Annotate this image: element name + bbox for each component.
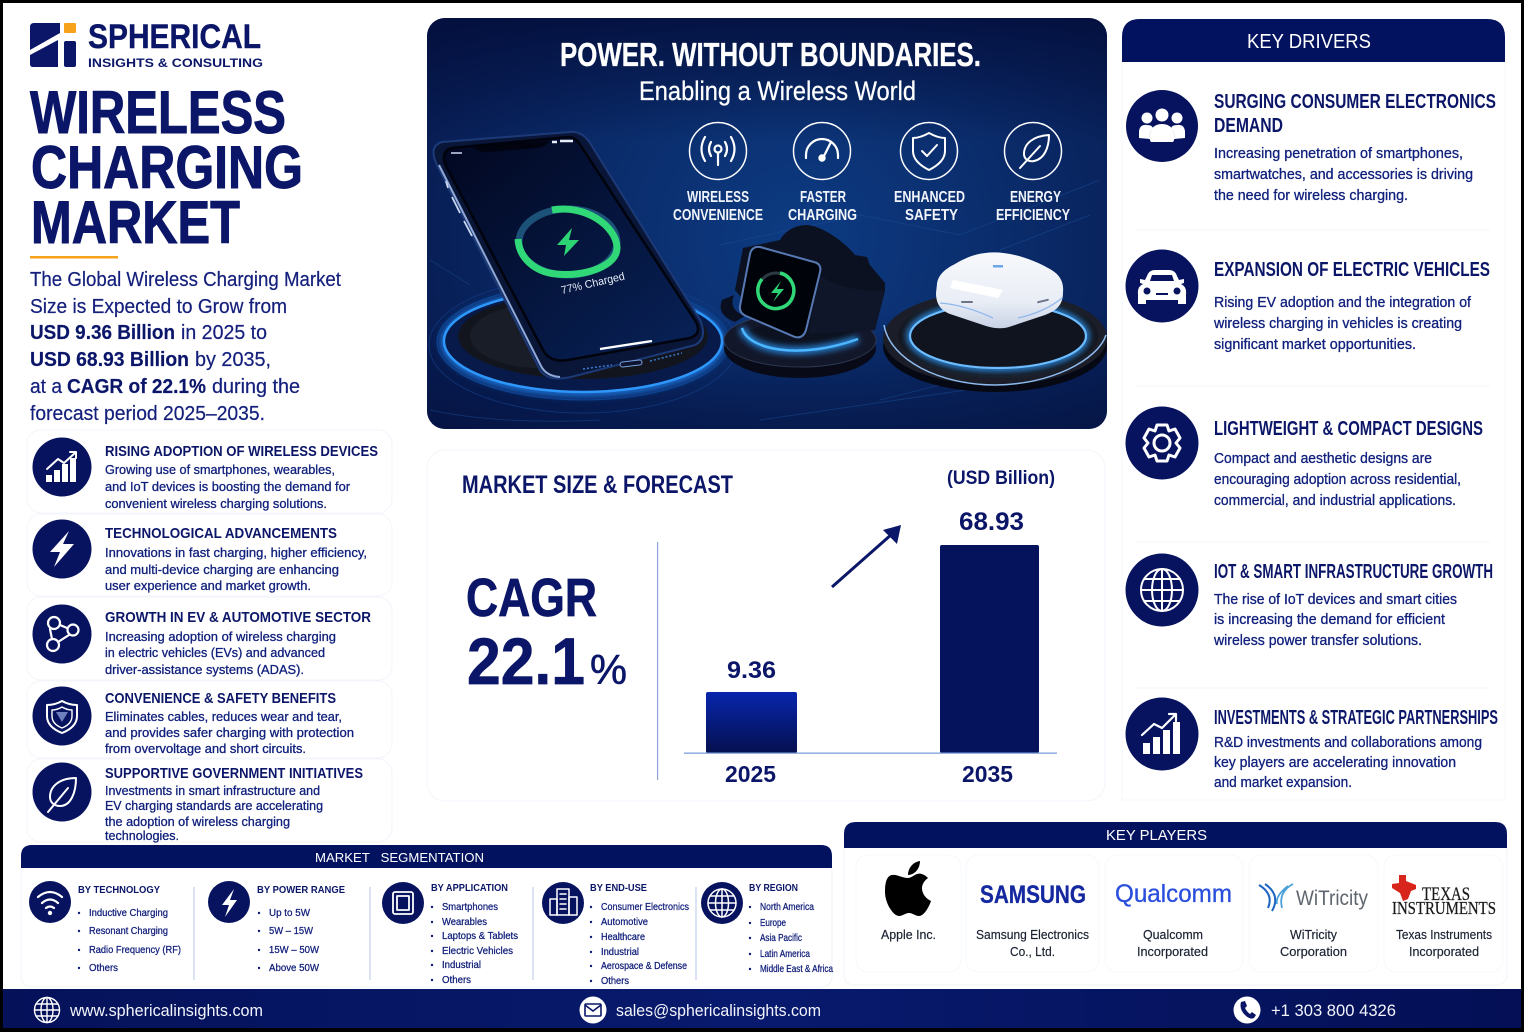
summary paragraph: at a [30, 376, 63, 398]
panel: market size and forecast: MARKET SIZE & FORECAST [462, 471, 733, 499]
segment: by application [382, 882, 518, 986]
driver: electric vehicles: significant market opportunities. [1214, 337, 1416, 353]
player: Texas Instruments: Incorporated [1409, 945, 1479, 959]
title: MARKET [31, 189, 240, 256]
segment: by power range: Up to 5W [269, 908, 311, 919]
CAGR callout: 22.1 [467, 624, 585, 698]
segment: by technology: Inductive Charging [89, 908, 168, 919]
segment: by application: Others [442, 975, 471, 986]
segment: by application: Laptops & Tablets [442, 931, 518, 942]
driver: IoT and smart infrastructure: The rise of IoT devices and smart cities [1214, 592, 1457, 608]
segment: by region: North America [760, 902, 814, 913]
card: EV and automotive: GROWTH IN EV & AUTOMOTIVE SECTOR [105, 609, 371, 626]
card: rising adoption: and IoT devices is boosting the demand for [105, 479, 351, 494]
segment: by region: Asia Pacific [760, 933, 802, 944]
card: EV and automotive [27, 597, 392, 680]
driver: consumer electronics: DEMAND [1214, 115, 1283, 137]
player: Qualcomm: Qualcomm [1115, 880, 1232, 908]
player: Samsung [966, 855, 1099, 972]
summary paragraph: The Global Wireless Charging Market [30, 269, 341, 291]
segment: by power range: Above 50W [269, 963, 320, 974]
smartwatch [721, 225, 885, 337]
segment: by region: Europe [760, 918, 786, 929]
footer: +1 303 800 4326 [1271, 1001, 1396, 1020]
driver: consumer electronics: smartwatches, and accessories is driving [1214, 167, 1473, 183]
player: Qualcomm [1105, 855, 1243, 972]
driver: compact designs [1126, 406, 1483, 509]
card: technological advancements: user experience and market growth. [105, 578, 311, 593]
CAGR callout: CAGR [466, 568, 597, 628]
player: WiTricity: Corporation [1280, 945, 1347, 959]
summary paragraph [30, 269, 341, 425]
icon: mail [580, 996, 606, 1024]
hero heading [560, 36, 981, 106]
player: Samsung: Co., Ltd. [1010, 945, 1055, 959]
card: convenience and safety: Eliminates cables, reduces wear and tear, [105, 709, 342, 724]
earbuds case [936, 252, 1063, 328]
segment: by end-use: Aerospace & Defense [601, 961, 687, 972]
player: Texas Instruments: TEXAS [1422, 884, 1470, 905]
segment: by region [701, 882, 833, 975]
bar chart: 9.36 [727, 657, 776, 684]
player: WiTricity [1249, 855, 1378, 972]
icon: phone [1234, 996, 1260, 1024]
summary paragraph: in 2025 to [181, 322, 267, 344]
panel: growth factors [27, 430, 392, 843]
benefit: faster charging [788, 122, 857, 224]
segment: by power range: 15W – 50W [269, 945, 320, 956]
segment: by end-use [542, 882, 689, 987]
hero heading: POWER. WITHOUT BOUNDARIES. [560, 36, 981, 73]
panel: key players: KEY PLAYERS [1106, 827, 1207, 844]
icon: globe [34, 998, 60, 1022]
driver: compact designs: commercial, and industrial applications. [1214, 493, 1456, 509]
logo: SPHERICAL [88, 18, 261, 56]
segment: by end-use: BY END-USE [590, 882, 647, 894]
summary paragraph: during the [212, 376, 300, 398]
card: convenience and safety [27, 681, 392, 758]
battery ring [518, 209, 617, 275]
segment: by power range: 5W – 15W [269, 926, 314, 937]
charging pad: phone [429, 277, 737, 413]
logo: INSIGHTS & CONSULTING [88, 56, 263, 70]
footer: sales@sphericalinsights.com [616, 1001, 821, 1020]
summary paragraph: USD 9.36 Billion [30, 322, 175, 344]
segment: by region: Latin America [760, 949, 810, 960]
card: rising adoption [27, 430, 392, 513]
segment: by technology: BY TECHNOLOGY [78, 884, 160, 896]
benefit: energy efficiency: ENERGY [1010, 189, 1062, 206]
card: technological advancements [27, 514, 392, 596]
driver: investments and partnerships: and market expansion. [1214, 775, 1352, 791]
driver: electric vehicles: wireless charging in vehicles is creating [1213, 316, 1462, 332]
arrow [832, 525, 901, 587]
card: government initiatives: technologies. [105, 828, 179, 843]
benefit: wireless convenience: WIRELESS [687, 189, 749, 206]
benefit: energy efficiency: EFFICIENCY [996, 207, 1071, 224]
segment: by end-use: Others [601, 976, 629, 987]
segment: by technology: Others [89, 963, 118, 974]
charging pad: earbuds [883, 291, 1107, 392]
card: rising adoption: convenient wireless charging solutions. [105, 496, 327, 511]
segment: by technology [29, 881, 181, 974]
driver: electric vehicles: Rising EV adoption and the integration of [1214, 295, 1472, 311]
driver: consumer electronics: the need for wireless charging. [1214, 188, 1408, 204]
CAGR callout: % [590, 646, 627, 693]
summary paragraph: Size is Expected to Grow from [30, 296, 287, 318]
hero panel [427, 18, 1107, 429]
panel: market size and forecast [427, 450, 1105, 801]
segment: by application: Smartphones [442, 902, 498, 913]
bar chart: 68.93 [959, 508, 1024, 536]
card: EV and automotive: driver-assistance systems (ADAS). [105, 662, 304, 677]
summary paragraph: by 2035, [195, 349, 271, 371]
CAGR callout [466, 568, 627, 698]
driver: compact designs: Compact and aesthetic designs are [1214, 451, 1432, 467]
bar chart: 2025 [725, 761, 776, 787]
benefit: faster charging: FASTER [800, 189, 846, 206]
panel: market segmentation [21, 845, 833, 987]
summary paragraph: forecast period 2025–2035. [30, 403, 265, 425]
bar chart [684, 508, 1057, 787]
player: Texas Instruments: Texas Instruments [1396, 928, 1492, 942]
card: government initiatives: SUPPORTIVE GOVERNMENT INITIATIVES [105, 765, 363, 782]
card: technological advancements: TECHNOLOGICAL ADVANCEMENTS [105, 525, 337, 542]
card: EV and automotive: Increasing adoption of wireless charging [105, 629, 336, 644]
player: Texas Instruments [1384, 855, 1503, 972]
summary paragraph: USD 68.93 Billion [30, 349, 189, 371]
player: Qualcomm: Qualcomm [1143, 928, 1203, 942]
player: Apple: Apple Inc. [881, 928, 936, 942]
segment: by end-use: Automotive [601, 917, 648, 928]
card: EV and automotive: in electric vehicles (EVs) and advanced [105, 645, 325, 660]
player: Apple [856, 855, 961, 972]
card: government initiatives: Investments in smart infrastructure and [105, 783, 320, 798]
driver: consumer electronics: Increasing penetration of smartphones, [1214, 146, 1463, 162]
summary paragraph: CAGR of 22.1% [67, 376, 206, 398]
driver: IoT and smart infrastructure: wireless power transfer solutions. [1213, 633, 1422, 649]
segment: by technology: Resonant Charging [89, 926, 168, 937]
segment: by end-use: Consumer Electronics [601, 902, 689, 913]
driver: investments and partnerships: key players are accelerating innovation [1214, 755, 1456, 771]
driver: compact designs: encouraging adoption across residential, [1214, 472, 1461, 488]
segment: by end-use: Healthcare [601, 932, 645, 943]
segment: by region: BY REGION [749, 882, 798, 894]
panel: market segmentation: MARKET SEGMENTATION [315, 850, 484, 865]
benefit: wireless convenience: CONVENIENCE [673, 207, 763, 224]
benefit: wireless convenience [673, 122, 763, 224]
card: government initiatives: EV charging standards are accelerating [105, 798, 323, 813]
panel: key players [844, 822, 1507, 985]
driver: investments and partnerships [1126, 698, 1498, 791]
card: government initiatives [27, 759, 392, 843]
panel: key drivers [1122, 19, 1505, 800]
logo [30, 18, 263, 70]
phone: 77% Charged [560, 271, 626, 297]
card: convenience and safety: and provides safer charging with protection [105, 725, 354, 740]
card: convenience and safety: CONVENIENCE & SAFETY BENEFITS [105, 690, 336, 707]
title: CHARGING [31, 134, 303, 201]
player: WiTricity: WiTricity [1296, 887, 1368, 910]
phone [433, 132, 703, 378]
card: government initiatives: the adoption of wireless charging [105, 814, 290, 829]
driver: consumer electronics [1126, 90, 1496, 204]
segment: by power range: BY POWER RANGE [257, 884, 345, 896]
benefit: enhanced safety: SAFETY [905, 207, 959, 224]
segment: by application: Electric Vehicles [442, 946, 513, 957]
driver: IoT and smart infrastructure [1126, 554, 1493, 649]
card: convenience and safety: from overvoltage and short circuits. [105, 741, 306, 756]
card: technological advancements: Innovations in fast charging, higher efficiency, [105, 545, 367, 560]
title [30, 79, 303, 258]
charging pad: watch [724, 313, 876, 378]
player: Qualcomm: Incorporated [1137, 945, 1208, 959]
player: Samsung: SAMSUNG [980, 881, 1086, 909]
hero heading: Enabling a Wireless World [639, 76, 916, 106]
segment: by power range [208, 881, 345, 974]
driver: IoT and smart infrastructure: is increasing the demand for efficient [1214, 612, 1445, 628]
player: WiTricity: WiTricity [1290, 928, 1338, 942]
segment: by end-use: Industrial [601, 947, 639, 958]
driver: investments and partnerships: R&D investments and collaborations among [1214, 735, 1482, 751]
driver: electric vehicles [1126, 250, 1490, 353]
segment: by region: Middle East & Africa [760, 964, 833, 975]
benefit: enhanced safety: ENHANCED [894, 189, 965, 206]
card: rising adoption: Growing use of smartphones, wearables, [105, 462, 335, 477]
benefit: faster charging: CHARGING [788, 207, 857, 224]
benefit: energy efficiency [996, 122, 1071, 224]
player: Samsung: Samsung Electronics [976, 928, 1089, 942]
card: rising adoption: RISING ADOPTION OF WIRELESS DEVICES [105, 443, 378, 460]
segment: by application: BY APPLICATION [431, 882, 508, 894]
title: WIRELESS [30, 79, 286, 146]
footer: www.sphericalinsights.com [69, 1001, 263, 1020]
segment: by technology: Radio Frequency (RF) [89, 945, 181, 956]
bar chart: 2035 [962, 761, 1013, 787]
panel: market size and forecast: (USD Billion) [947, 468, 1055, 489]
footer [3, 989, 1521, 1028]
segment: by application: Industrial [442, 960, 481, 971]
panel: key drivers: KEY DRIVERS [1247, 31, 1371, 53]
player: Texas Instruments: INSTRUMENTS [1392, 898, 1496, 918]
segment: by application: Wearables [442, 917, 487, 928]
card: technological advancements: and multi-device charging are enhancing [105, 562, 339, 577]
benefit: enhanced safety [894, 122, 965, 224]
